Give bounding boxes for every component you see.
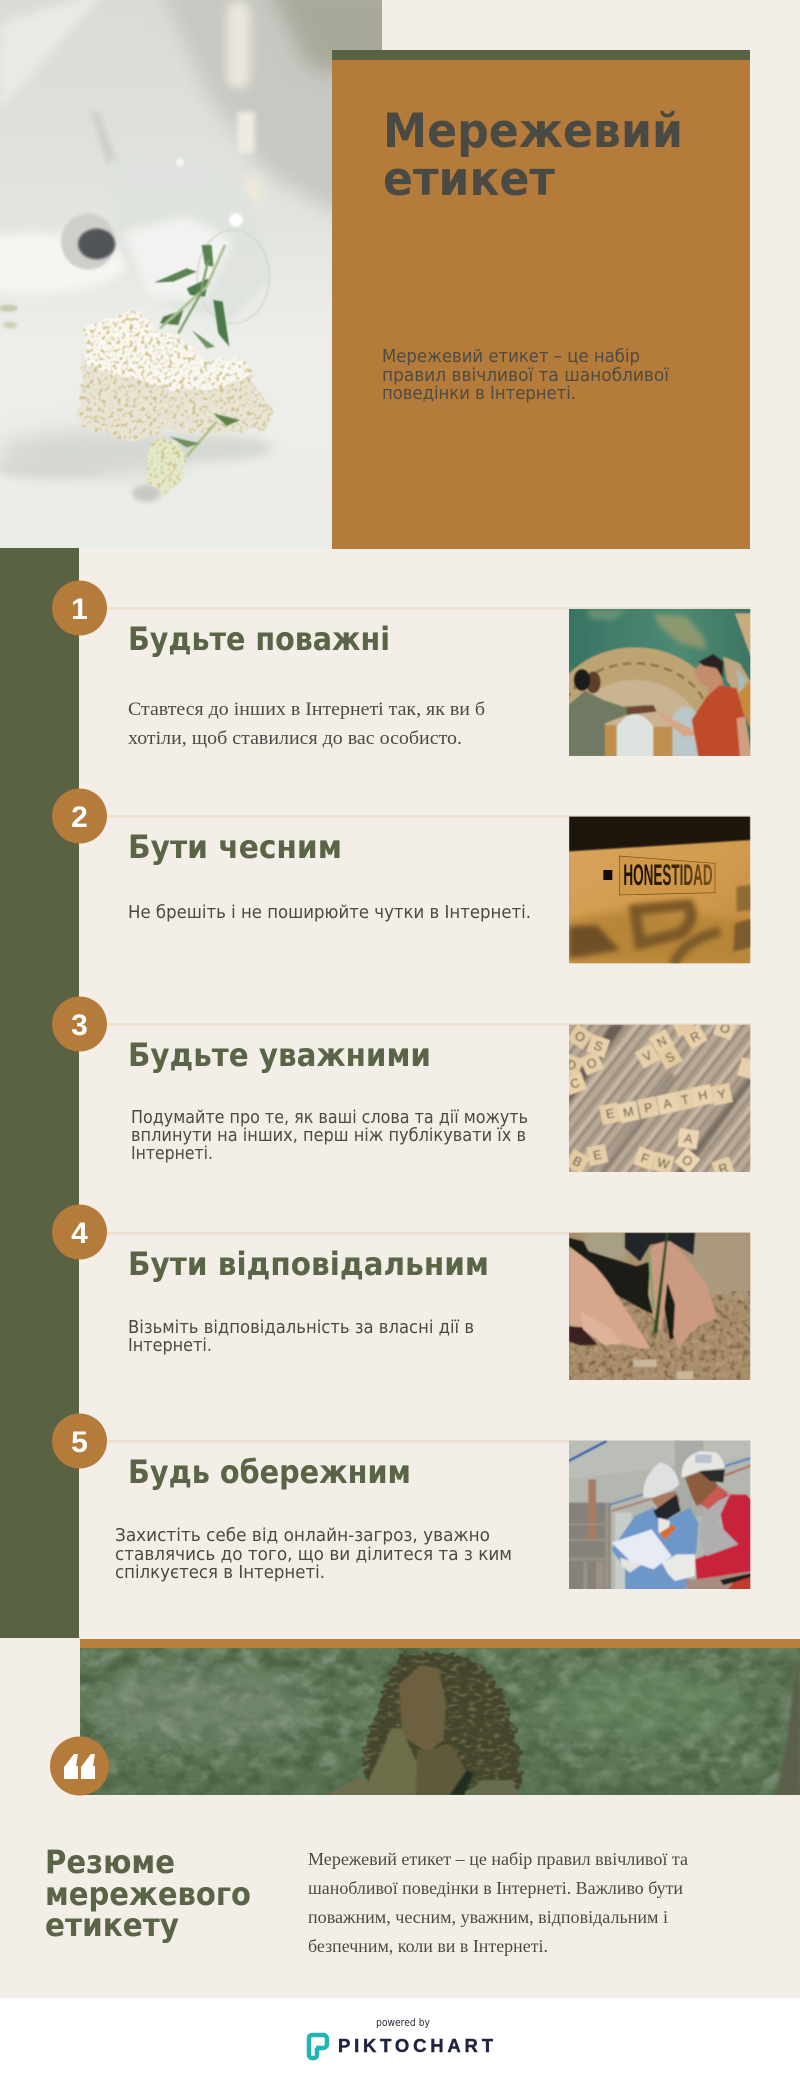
text 3: вплинути на інших, перш ніж публікувати їх в <box>131 1126 526 1146</box>
heading 2: Бути чесним <box>128 828 342 866</box>
title: етикет <box>383 152 556 207</box>
summary heading: мережевого <box>45 1875 251 1913</box>
icon: piktochart logo <box>309 2035 327 2058</box>
intro text: Мережевий етикет – це набір <box>382 347 640 367</box>
photo 1: fist bump <box>569 609 750 756</box>
heading 5: Будь обережним <box>128 1453 411 1491</box>
text 3: Інтернеті. <box>131 1144 213 1164</box>
step 5 <box>52 1414 753 1592</box>
summary text: поважним, чесним, уважним, відповідальним і <box>308 1907 668 1927</box>
intro text: правил ввічливої та шанобливої <box>382 366 669 386</box>
photo 3: empathy tiles: O <box>584 1055 599 1072</box>
text 5 <box>115 1525 512 1583</box>
number badge 3: 3 <box>71 1009 88 1042</box>
text 1: Ставтеся до інших в Інтернеті так, як ви б <box>128 699 485 720</box>
number badge 4: 4 <box>71 1217 88 1250</box>
photo 3: empathy tiles: O <box>572 1028 588 1046</box>
olive sidebar <box>0 548 79 1638</box>
text 5: Захистіть себе від онлайн-загроз, уважно <box>115 1525 490 1546</box>
photo 3: empathy tiles <box>569 1024 750 1172</box>
photo 3: empathy tiles: S <box>663 1049 677 1066</box>
number badge 2: 2 <box>71 801 88 834</box>
photo 3: empathy tiles: E <box>605 1106 616 1122</box>
photo 3: empathy tiles: P <box>643 1100 654 1116</box>
photo 3: empathy tiles: W <box>656 1155 671 1172</box>
photo 3: empathy tiles: H <box>697 1088 709 1103</box>
photo 4: hands planting <box>569 1233 750 1380</box>
step 4 <box>52 1204 750 1380</box>
number badge 4 <box>52 1204 107 1260</box>
number badge 1 <box>52 580 107 636</box>
heading 3: Будьте уважними <box>128 1036 431 1074</box>
photo 3: empathy tiles: O <box>718 1020 732 1037</box>
photo 3: empathy tiles: M <box>622 1104 635 1120</box>
step 3 <box>52 996 760 1180</box>
number badge 2 <box>52 788 107 844</box>
photo 3: empathy tiles: O <box>679 1152 696 1170</box>
number badge 5 <box>52 1414 107 1468</box>
text 1: хотіли, щоб ставилися до вас особисто. <box>128 728 462 749</box>
text 3: Подумайте про те, як ваші слова та дії можуть <box>131 1108 528 1128</box>
photo 3: empathy tiles: Y <box>716 1087 728 1102</box>
orange bar above lower photo <box>80 1639 800 1648</box>
piktochart wordmark: PIKTOCHART <box>338 2035 494 2056</box>
orange panel <box>332 60 750 549</box>
intro text <box>382 347 669 404</box>
text 4 <box>128 1318 474 1356</box>
heading 4: Бути відповідальним <box>128 1245 489 1283</box>
summary heading: Резюме <box>45 1843 175 1881</box>
photo 3: empathy tiles: D <box>565 1057 578 1073</box>
photo 3: empathy tiles: V <box>640 1048 655 1064</box>
photo 3: empathy tiles: R <box>717 1161 730 1177</box>
title <box>383 104 683 207</box>
quote badge <box>50 1736 109 1796</box>
hero photo: glass and white flowers <box>0 0 382 508</box>
heading 1: Будьте поважні <box>128 620 390 658</box>
photo 3: empathy tiles: T <box>680 1092 691 1108</box>
photo 2: honesty sign <box>569 813 753 965</box>
photo 3: empathy tiles: N <box>654 1034 669 1050</box>
photo 3: empathy tiles: E <box>592 1148 603 1163</box>
intro text: поведінки в Інтернеті. <box>382 384 576 404</box>
summary heading: етикету <box>45 1906 179 1944</box>
photo 3: empathy tiles: A <box>683 1131 694 1147</box>
photo 3: empathy tiles: S <box>592 1038 605 1054</box>
photo 3: empathy tiles: C <box>568 1076 582 1092</box>
summary text: шанобливої поведінки в Інтернеті. Важливо бути <box>308 1878 683 1898</box>
icon: quotation marks <box>64 1754 95 1779</box>
step 2 <box>52 788 753 965</box>
text 1 <box>128 699 485 749</box>
step 1 <box>52 580 750 756</box>
photo 3: empathy tiles: A <box>662 1096 674 1112</box>
text 5: ставлячись до того, що ви ділитеся та з ким <box>115 1544 512 1565</box>
photo 3: empathy tiles: R <box>688 1029 703 1045</box>
photo 3: empathy tiles: B <box>570 1154 584 1170</box>
number badge 5: 5 <box>71 1426 88 1459</box>
rule lines <box>100 607 750 1442</box>
text 3 <box>131 1108 528 1164</box>
text 2: Не брешіть і не поширюйте чутки в Інтернеті. <box>128 903 531 923</box>
lower photo: woman meditating in foliage <box>80 1648 800 1795</box>
number badge 3 <box>52 996 107 1052</box>
summary heading <box>45 1843 251 1944</box>
title: Мережевий <box>383 104 683 159</box>
text 4: Візьміть відповідальність за власні дії в <box>128 1318 474 1338</box>
photo 5: engineers <box>567 1438 753 1592</box>
photo 3: empathy tiles: F <box>639 1151 651 1167</box>
footer <box>0 1998 800 2078</box>
text 4: Інтернеті. <box>128 1336 212 1356</box>
summary text: Мережевий етикет – це набір правил ввічливої та <box>308 1849 688 1869</box>
summary text: безпечним, коли ви в Інтернеті. <box>308 1936 548 1956</box>
title panel <box>332 50 750 549</box>
number badge 1: 1 <box>71 593 88 626</box>
powered by label: powered by <box>376 2016 430 2029</box>
panel accent bar <box>332 50 750 60</box>
summary text <box>308 1849 688 1956</box>
text 5: спілкуєтеся в Інтернеті. <box>115 1562 325 1583</box>
